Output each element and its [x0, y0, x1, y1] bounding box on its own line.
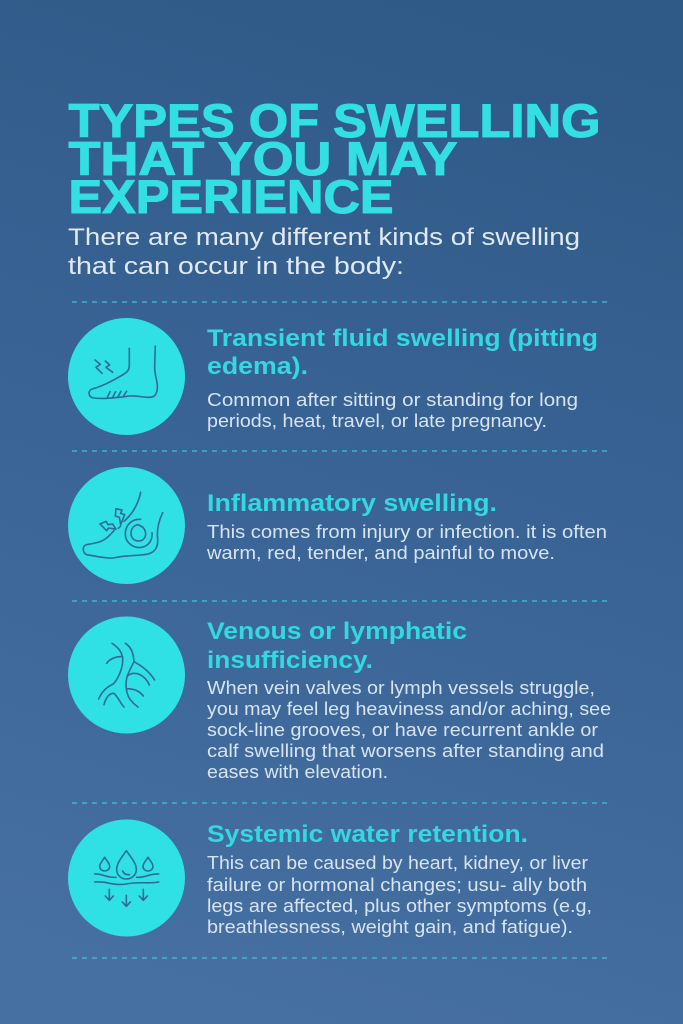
body text: This can be caused by heart, kidney, or liver [207, 852, 588, 873]
icon: water drops [68, 820, 185, 936]
body text [207, 677, 611, 782]
body text [207, 852, 592, 937]
panel: systemic water retention [68, 820, 592, 937]
body text: periods, heat, travel, or late pregnancy. [207, 410, 547, 431]
heading: Systemic water retention. [207, 821, 528, 848]
body text: breathlessness, weight gain, and fatigue). [207, 916, 573, 937]
icon: inflamed heel [68, 467, 185, 584]
panel: venous or lymphatic insufficiency [68, 616, 611, 782]
subtitle [68, 224, 580, 280]
heading: insufficiency. [207, 647, 373, 674]
heading: Transient fluid swelling (pitting [207, 325, 598, 352]
body text: warm, red, tender, and painful to move. [206, 542, 555, 563]
body text: This comes from injury or infection. it is often [207, 521, 607, 542]
heading: Inflammatory swelling. [207, 490, 497, 517]
body text: eases with elevation. [207, 761, 388, 782]
title [68, 95, 600, 224]
subtitle: There are many different kinds of swelling [68, 224, 580, 251]
panel: transient fluid swelling [68, 318, 598, 435]
heading: Venous or lymphatic [207, 618, 467, 645]
body text: Common after sitting or standing for long [207, 389, 578, 410]
body text: sock-line grooves, or have recurrent ankle or [207, 719, 598, 740]
title: TYPES OF SWELLING [68, 95, 600, 148]
title: THAT YOU MAY [68, 133, 457, 186]
body text: When vein valves or lymph vessels struggle, [207, 677, 595, 698]
body text [207, 389, 578, 431]
body text: you may feel leg heaviness and/or aching, see [207, 698, 611, 719]
body text [206, 521, 607, 563]
icon: swollen foot [68, 318, 185, 435]
subtitle: that can occur in the body: [68, 253, 404, 280]
title: EXPERIENCE [68, 171, 394, 224]
body text: legs are affected, plus other symptoms (e.g, [207, 895, 592, 916]
heading [207, 618, 467, 674]
heading [207, 325, 598, 380]
icon: branching vessels [68, 616, 185, 734]
heading: edema). [207, 353, 308, 380]
panel: inflammatory swelling [68, 467, 607, 584]
body text: failure or hormonal changes; usu- ally both [207, 874, 587, 895]
body text: calf swelling that worsens after standing and [207, 740, 604, 761]
